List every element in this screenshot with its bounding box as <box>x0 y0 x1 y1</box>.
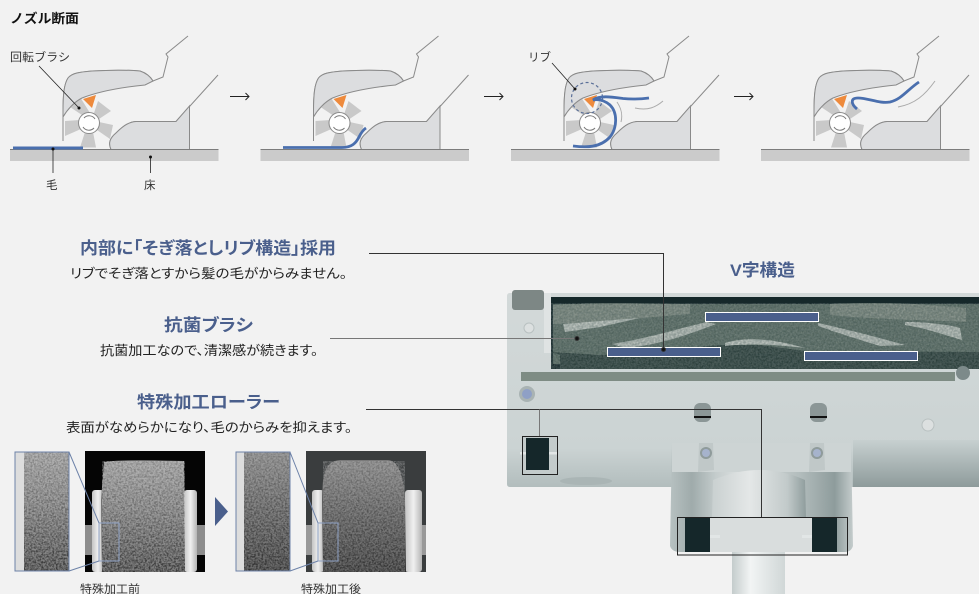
panel: cross-section step 3 <box>511 36 720 161</box>
label: floor <box>144 156 156 192</box>
nozzle photo <box>507 290 979 594</box>
wheels <box>520 436 837 552</box>
inset after <box>236 452 290 571</box>
label: floor: 床 <box>144 179 156 192</box>
brush pad labels <box>608 312 918 360</box>
panel: cross-section step 2 <box>260 36 469 161</box>
rib dashed circle <box>572 82 602 114</box>
lower strip <box>521 372 955 381</box>
leader: rollers <box>366 410 762 517</box>
label: hair: 毛 <box>46 179 58 192</box>
zoom connector before <box>69 452 99 571</box>
heading: V structure: V字構造 <box>730 261 795 280</box>
text: rib: リブでそぎ落とすから髪の毛がからみません。 <box>70 266 347 281</box>
brush bristles <box>551 303 979 369</box>
hair swept <box>573 97 649 147</box>
wheel highlight boxes <box>522 436 848 555</box>
label: rotating brush <box>10 50 80 110</box>
screws and slots <box>519 323 970 485</box>
photo before <box>15 451 205 572</box>
neck <box>670 443 853 552</box>
air flow <box>898 81 935 107</box>
text: antibacterial brush: 抗菌加工なので、清潔感が続きます。 <box>100 343 318 358</box>
arrow 3 <box>734 93 753 100</box>
label: rib: リブ <box>528 50 551 64</box>
arrow: before to after <box>215 497 228 526</box>
title: ノズル断面 <box>10 11 79 26</box>
leader: antibacterial brush <box>330 336 579 340</box>
text: roller: 表面がなめらかになり、毛のからみを抑えます。 <box>66 420 352 435</box>
arrow 1 <box>230 93 249 100</box>
end cap <box>512 290 544 310</box>
label: rib <box>528 50 576 90</box>
label: hair <box>46 148 58 192</box>
body <box>507 293 979 487</box>
panel: cross-section step 4 <box>761 36 970 161</box>
label: rotating brush: 回転ブラシ <box>10 50 70 64</box>
tube <box>732 552 785 594</box>
hair on floor <box>13 146 83 150</box>
arrow 2 <box>484 93 503 100</box>
zoom connector after <box>290 452 318 571</box>
photo after <box>236 451 426 572</box>
panel: cross-section step 1 <box>10 36 218 192</box>
hair sucked away <box>852 82 919 109</box>
heading: rib: 内部に「そぎ落としリブ構造」採用 <box>80 238 336 258</box>
brush opening <box>551 297 979 369</box>
heading: roller: 特殊加工ローラー <box>137 393 280 412</box>
leader: rib <box>369 254 666 352</box>
hair lifted <box>283 128 366 148</box>
inset before <box>15 452 69 571</box>
air flow arrows <box>617 101 663 122</box>
heading: antibacterial brush: 抗菌ブラシ <box>164 315 253 335</box>
